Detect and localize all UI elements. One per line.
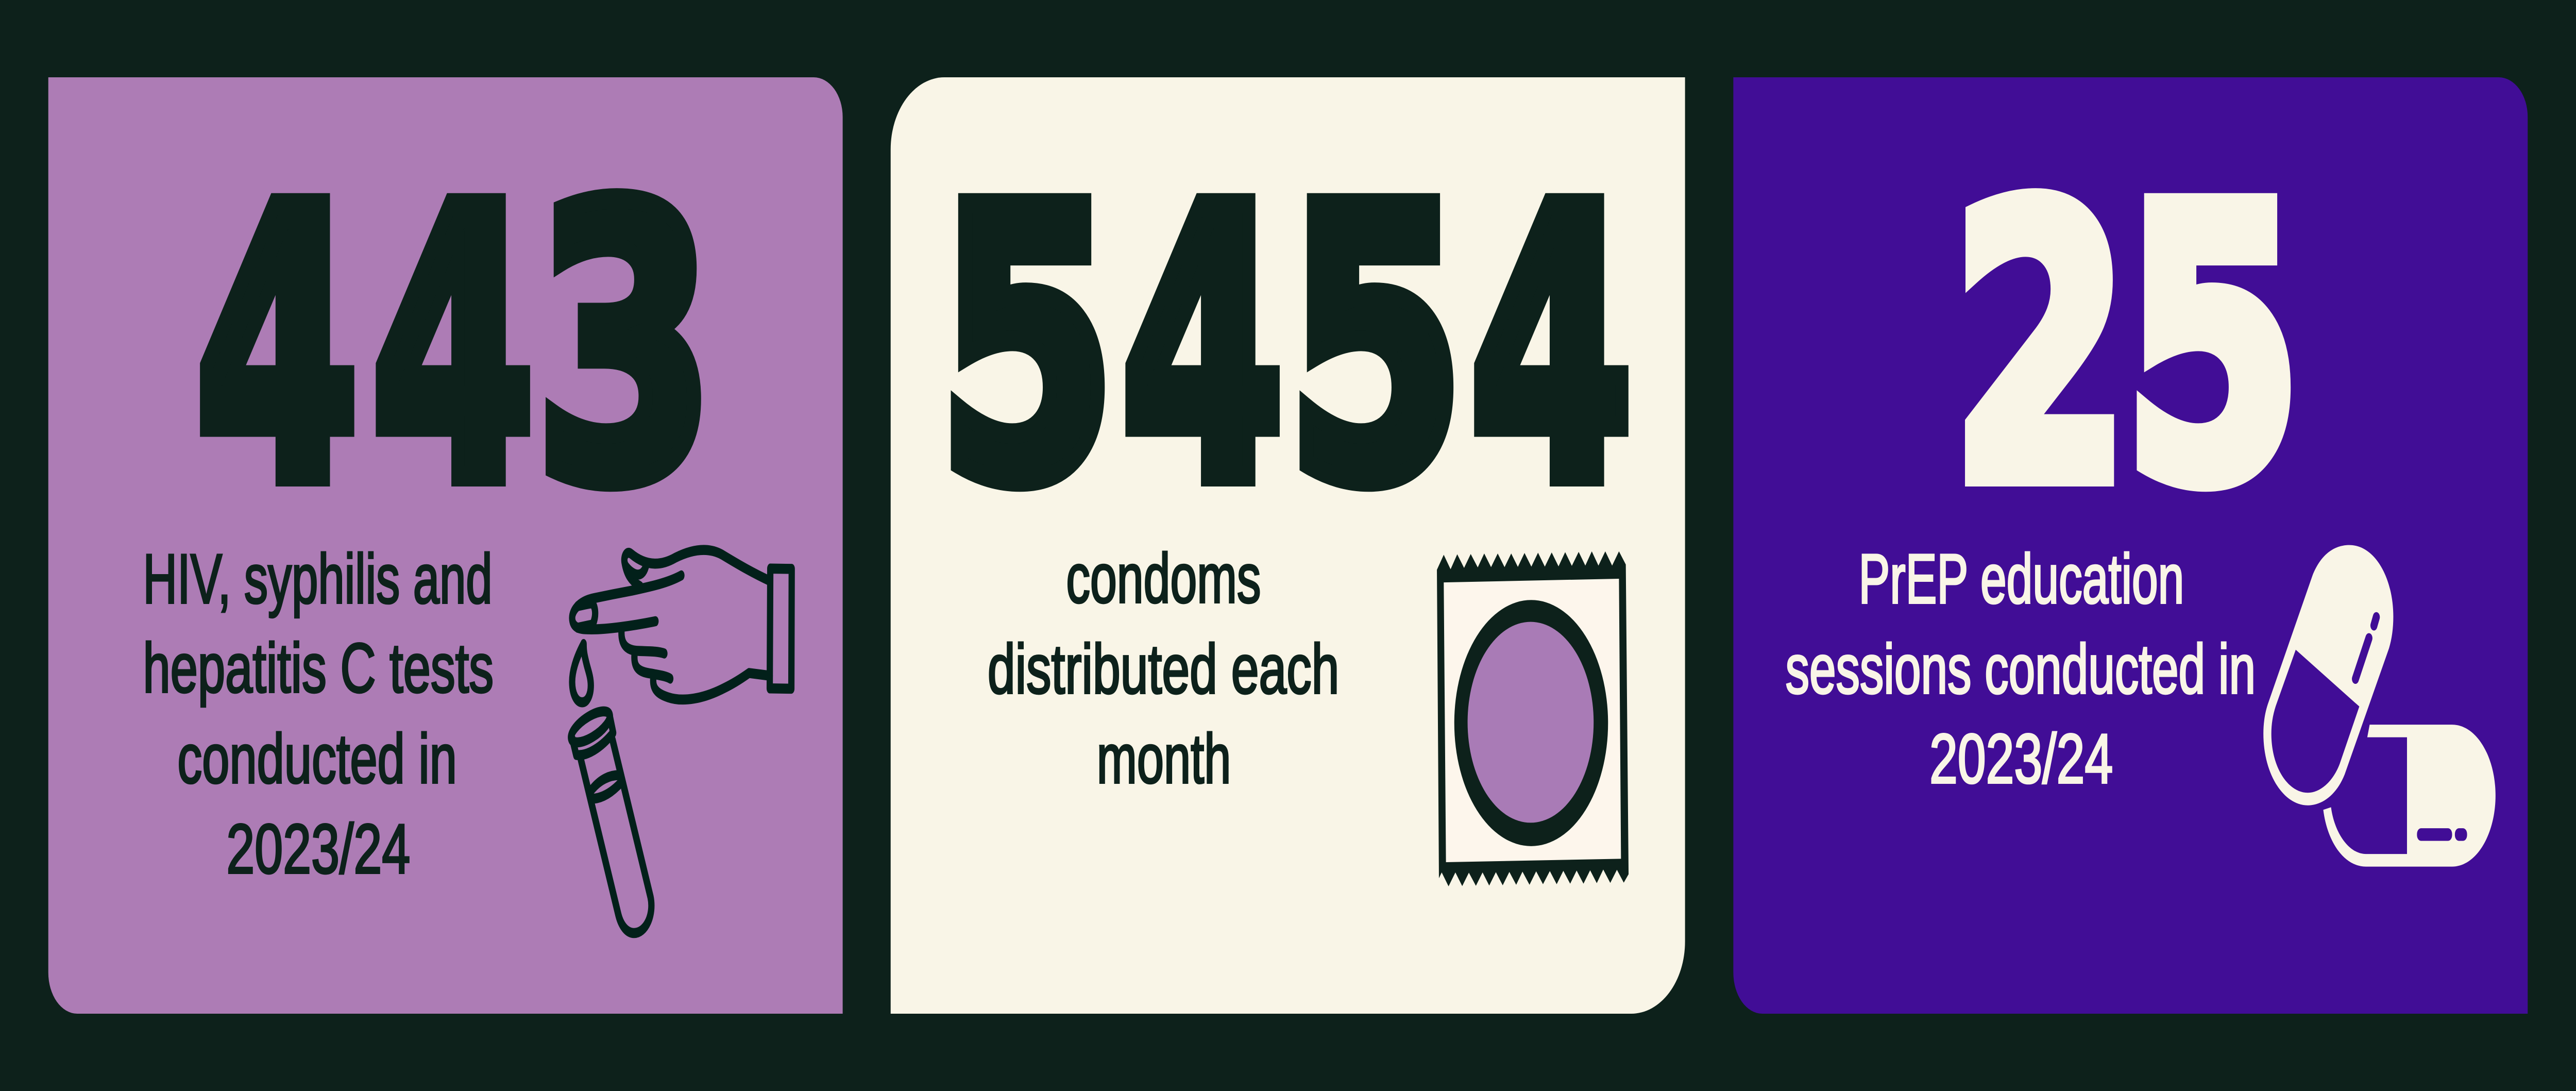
big number: 443 bbox=[196, 129, 715, 564]
text: tests description: 2023/24 bbox=[226, 810, 410, 888]
panel: tests bbox=[48, 77, 843, 1014]
big number: 5454: 5 bbox=[938, 129, 1115, 565]
big number: 5454: 5 bbox=[1287, 129, 1464, 565]
text: tests description: hepatitis C tests bbox=[143, 629, 494, 708]
text: condoms description: month bbox=[1097, 720, 1231, 798]
text: PrEP description bbox=[1786, 540, 2256, 798]
panel background: cream bbox=[891, 77, 1685, 1014]
big number: 25 bbox=[1952, 129, 2301, 565]
icon: capsules bbox=[2263, 545, 2496, 867]
text: PrEP description: 2023/24 bbox=[1929, 720, 2113, 798]
icon: hand, blood drop and test tube bbox=[569, 550, 792, 933]
panel: condoms bbox=[891, 77, 1685, 1014]
big number: 5454: 4 bbox=[1470, 129, 1633, 564]
text: tests description bbox=[143, 540, 494, 888]
text: tests description: HIV, syphilis and bbox=[143, 540, 493, 618]
big number: 5454: 4 bbox=[1122, 129, 1284, 564]
text: condoms description bbox=[988, 540, 1339, 798]
panel: PrEP bbox=[1733, 77, 2528, 1014]
big number: 443: 4 bbox=[372, 129, 534, 564]
text: PrEP description: sessions conducted in bbox=[1786, 630, 2256, 709]
big number: 443: 4 bbox=[196, 129, 359, 564]
panel background: purple bbox=[48, 77, 843, 1014]
text: PrEP description: PrEP education bbox=[1859, 540, 2184, 618]
panel background: indigo bbox=[1733, 77, 2528, 1014]
big number: 25: 5 bbox=[2124, 129, 2301, 565]
big number: 5454 bbox=[938, 129, 1633, 565]
text: condoms description: condoms bbox=[1066, 540, 1261, 618]
big number: 443: 3 bbox=[535, 129, 715, 564]
icon: condom packet bbox=[1437, 551, 1629, 886]
text: condoms description: distributed each bbox=[988, 630, 1339, 709]
big number: 25: 2 bbox=[1952, 129, 2129, 565]
text: tests description: conducted in bbox=[177, 720, 457, 798]
